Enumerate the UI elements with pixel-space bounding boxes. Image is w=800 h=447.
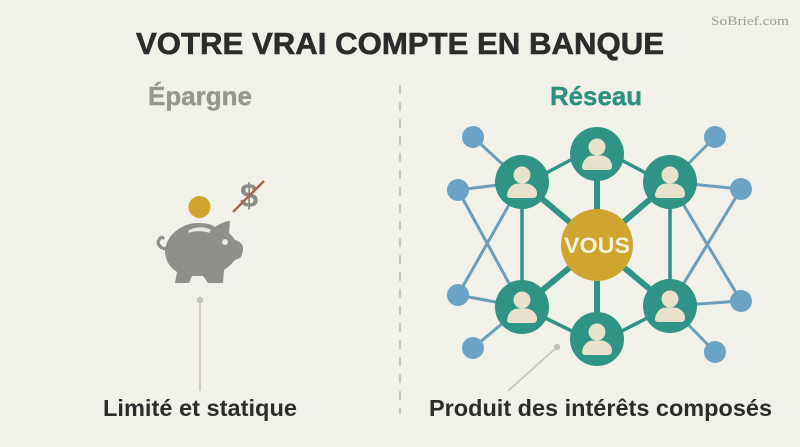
outer contact nodes: [447, 126, 752, 363]
watermark: SoBrief.com: [711, 13, 789, 28]
center node: VOUS: [561, 209, 633, 281]
person node: top left: [495, 155, 549, 209]
center node: VOUS: VOUS: [564, 233, 630, 258]
inner connections: [522, 154, 670, 339]
person node: bottom right: [643, 279, 697, 333]
icon: crossed-out dollar: [233, 177, 264, 214]
caption: Limité et statique: Limité et statique: [103, 395, 297, 421]
person node: bottom left: [495, 280, 549, 334]
icon: crossed-out dollar: $: [240, 177, 258, 214]
person node: top right: [643, 155, 697, 209]
caption: Produit des intérêts composés: Produit des intérêts composés: [429, 395, 772, 421]
icon: coin: [188, 196, 210, 218]
callout: piggy pointer: [197, 297, 203, 391]
outer connections: [458, 137, 741, 352]
heading: Épargne: Épargne: [148, 81, 252, 111]
network diagram: [447, 126, 752, 366]
title: VOTRE VRAI COMPTE EN BANQUE: [136, 26, 664, 61]
person node: bottom: [570, 312, 624, 366]
icon: piggy bank: [158, 221, 243, 283]
heading: Réseau: Réseau: [550, 81, 642, 111]
callout: network pointer: [508, 344, 560, 391]
person node: top: [570, 127, 624, 181]
